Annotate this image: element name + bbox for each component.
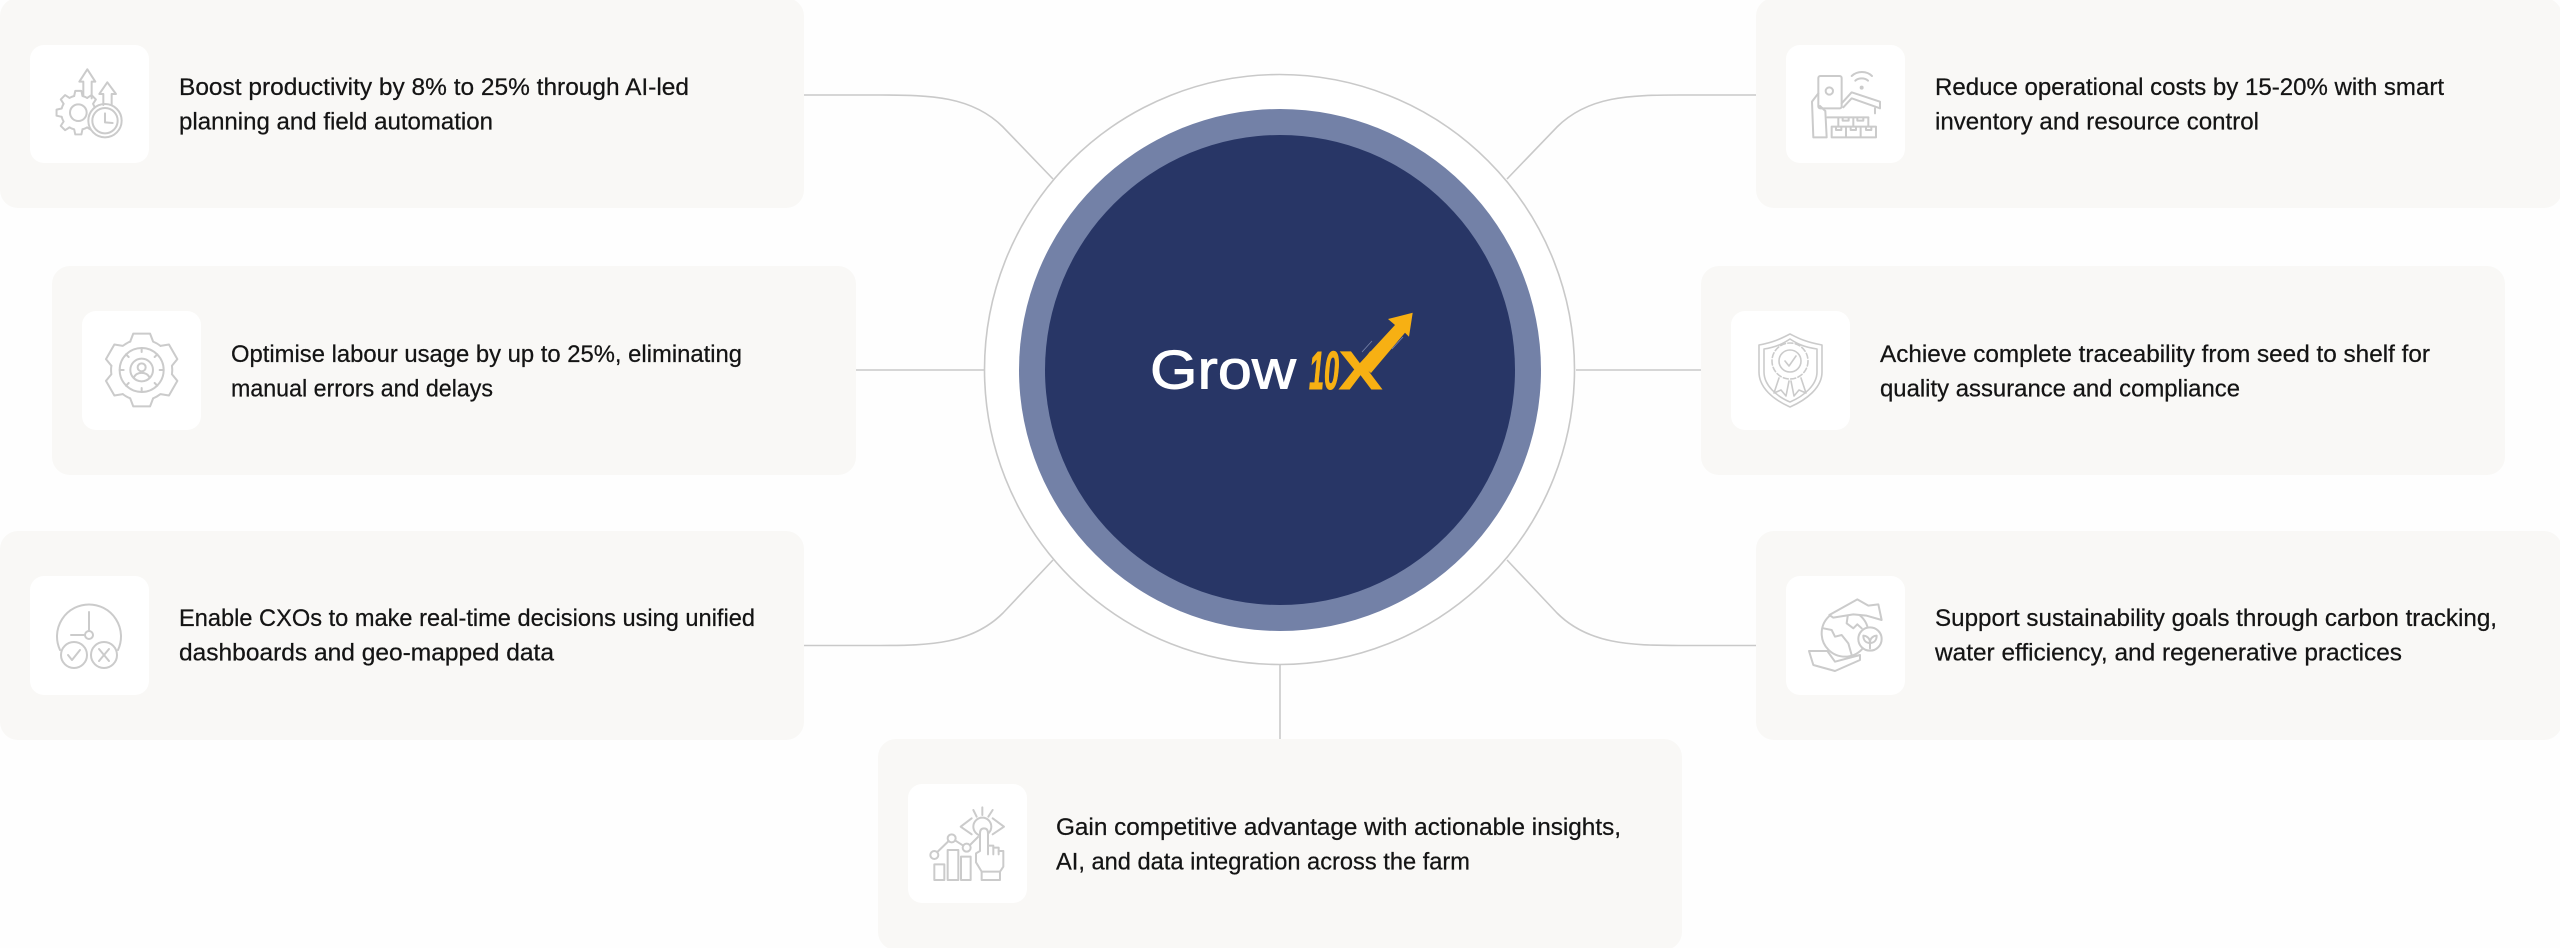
logo digits and X: 10	[1309, 341, 1339, 401]
text	[1934, 605, 2497, 666]
panel: traceability	[1701, 266, 2505, 475]
icon tile	[1786, 576, 1905, 695]
logo digits and X: X	[1339, 341, 1382, 401]
icon: gear with person	[101, 334, 183, 406]
text: manual errors and delays	[231, 376, 493, 402]
logo word Grow: Grow	[1150, 338, 1296, 400]
text: Enable CXOs to make real-time decisions using unified	[179, 605, 755, 632]
middle circle	[1019, 109, 1541, 631]
text: Optimise labour usage by up to 25%, eliminating	[231, 341, 742, 368]
outer ring	[984, 74, 1574, 664]
icon: shield with badge	[1759, 334, 1822, 407]
icon: hands holding globe with leaf	[1809, 599, 1882, 671]
text: planning and field automation	[179, 108, 493, 136]
panel: sustainability	[1756, 531, 2560, 740]
logo: Grow 10X	[1150, 313, 1413, 401]
icon: gears with clock and arrows	[57, 69, 122, 137]
text: dashboards and geo-mapped data	[179, 640, 554, 666]
icon tile	[1786, 45, 1905, 163]
icon: phone, warehouse and wifi	[1812, 72, 1880, 137]
text: Boost productivity by 8% to 25% through AI-led	[179, 74, 689, 101]
icon tile	[82, 311, 201, 430]
text	[1880, 341, 2430, 402]
text: Achieve complete traceability from seed to shelf for	[1880, 341, 2430, 368]
panel: optimise labour	[52, 266, 856, 475]
text: Gain competitive advantage with actionable insights,	[1056, 814, 1621, 841]
text	[179, 605, 755, 666]
panel: reduce costs	[1756, 0, 2560, 208]
text	[231, 341, 742, 402]
panel: boost productivity	[0, 0, 804, 208]
text: water efficiency, and regenerative practices	[1934, 640, 2402, 666]
text: inventory and resource control	[1935, 108, 2259, 136]
text: quality assurance and compliance	[1880, 376, 2240, 402]
panel: competitive advantage	[878, 739, 1682, 948]
icon tile	[30, 45, 149, 163]
icon: gauge with check and cross	[57, 604, 121, 668]
icon tile	[30, 576, 149, 695]
text	[1935, 74, 2444, 136]
inner circle	[1045, 135, 1515, 605]
text: Reduce operational costs by 15-20% with smart	[1935, 74, 2444, 101]
central hub	[984, 74, 1574, 664]
logo arrow	[1359, 313, 1413, 373]
connector lines	[804, 95, 1756, 739]
text: Support sustainability goals through carbon tracking,	[1935, 605, 2497, 632]
icon tile	[908, 784, 1027, 903]
text: AI, and data integration across the farm	[1056, 848, 1470, 876]
text	[179, 74, 689, 136]
panel: CXO decisions	[0, 531, 804, 740]
icon: chart, eye and hand	[930, 807, 1004, 880]
icon tile	[1731, 311, 1850, 430]
text	[1056, 814, 1621, 876]
